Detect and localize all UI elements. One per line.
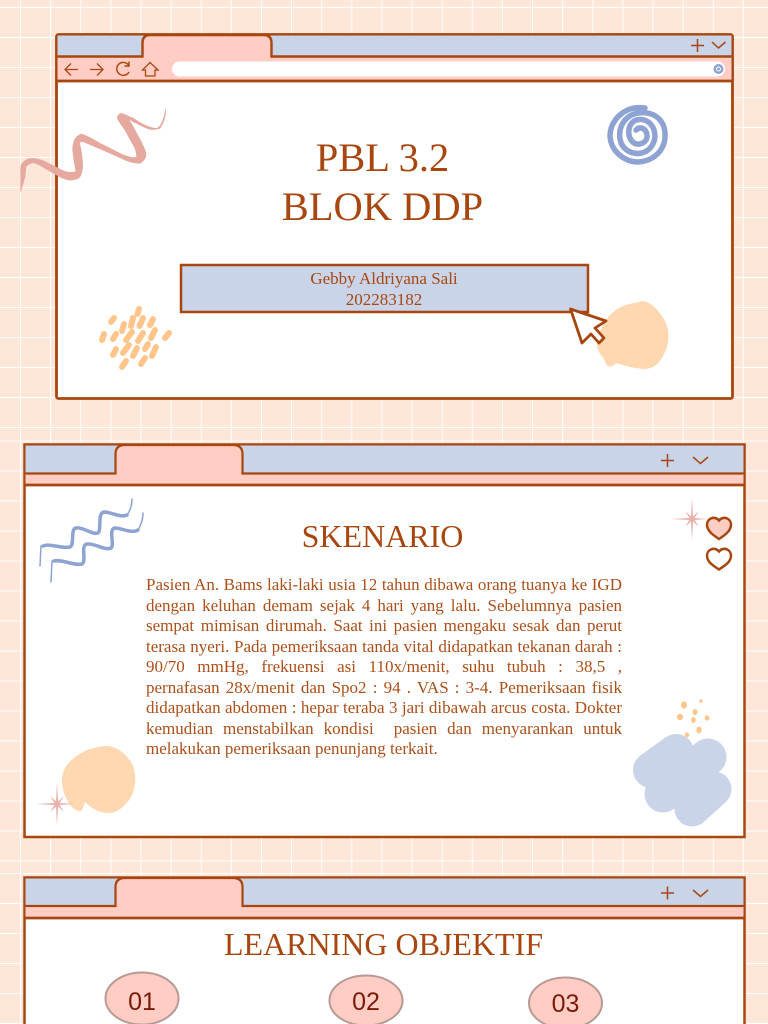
browser top bar [26,446,744,474]
tab outline [25,445,744,474]
heading: learning objektif: LEARNING OBJEKTIF [224,926,543,962]
heading: PBL title: BLOK DDP [282,184,483,229]
browser tab [25,878,744,908]
name box [181,265,588,312]
text block: scenario paragraph: terasa nyeri. Pada pemeriksaan tanda vital didapatkan tekanan darah : [146,636,622,656]
text block: scenario paragraph [146,575,622,758]
name box: 202283182 [346,290,422,309]
browser strip [26,906,744,916]
heading: PBL title: PBL 3.2 [316,135,449,180]
panel: learning objektif browser window [24,878,744,1024]
browser top bar [26,878,744,906]
decoration: orange dashes [102,309,169,367]
panel: skenario browser window [24,444,744,837]
decoration: blue spiral [610,108,665,162]
icon: plus [691,39,704,52]
text block: scenario paragraph: dengan keluhan demam sejak 4 hari yang lalu. Sebelumnya pasien [146,596,622,614]
badge 02 [330,976,402,1024]
icon: home [142,62,158,76]
browser tab [57,35,732,58]
badge 02: 02 [352,988,380,1016]
icon: forward arrow [90,64,103,76]
heading: PBL title [282,135,483,229]
badge 03 [529,978,602,1024]
icon: chevron [693,457,708,464]
text block: scenario paragraph: didapatkan abdomen : hepar teraba 3 jari dibawah arcus costa. Dokter [146,698,622,717]
icon: cursor arrow [570,309,606,343]
badge 01: 01 [128,988,156,1016]
icon: outline heart [707,549,731,570]
decoration: orange dots [677,699,709,738]
icon: plus [661,454,674,467]
icon: search [714,64,724,74]
icon: chevron [693,890,708,896]
decoration: peach blob [597,301,668,369]
decoration: pink sparkle top [671,497,708,541]
browser tab [25,445,744,475]
decoration: pink squiggle [21,109,166,192]
badge 01 [106,972,178,1024]
text block: scenario paragraph: Pasien An. Bams laki-laki usia 12 tahun dibawa orang tuanya ke IGD [146,575,622,594]
decoration: blue waves [40,499,143,582]
tab outline [57,35,732,56]
tab outline [25,878,744,906]
text block: scenario paragraph: 90/70 mmHg, frekuensi asi 110x/menit, suhu tubuh : 38,5 , [146,657,622,676]
decoration: peach blob lower [62,746,135,813]
address bar [172,62,725,76]
icon: reload [117,62,129,75]
browser top bar [58,36,732,56]
browser strip [26,474,744,484]
icon: back arrow [65,64,78,76]
icon: filled heart [707,518,731,539]
heading: skenario: SKENARIO [302,518,463,554]
text block: scenario paragraph: pernafasan 28x/menit dan Spo2 : 94 . VAS : 3-4. Pemeriksaan fisik [146,678,622,696]
text block: scenario paragraph: sempat mimisan dirumah. Saat ini pasien mengaku sesak dan perut [146,616,622,635]
name box: Gebby Aldriyana Sali [310,269,458,288]
browser toolbar [58,57,732,80]
badge 03: 03 [552,990,579,1018]
decoration: pink sparkle bottom [36,782,75,826]
text block: scenario paragraph: melakukan pemeriksaan penunjang terkait. [146,739,438,758]
text block: scenario paragraph: kemudian menstabilkan kondisi pasien dan menyarankan untuk [146,718,622,738]
icon: plus [661,886,674,900]
icon: chevron [712,42,726,48]
panel: title browser window [56,34,732,398]
decoration: blue cloud [651,752,714,809]
